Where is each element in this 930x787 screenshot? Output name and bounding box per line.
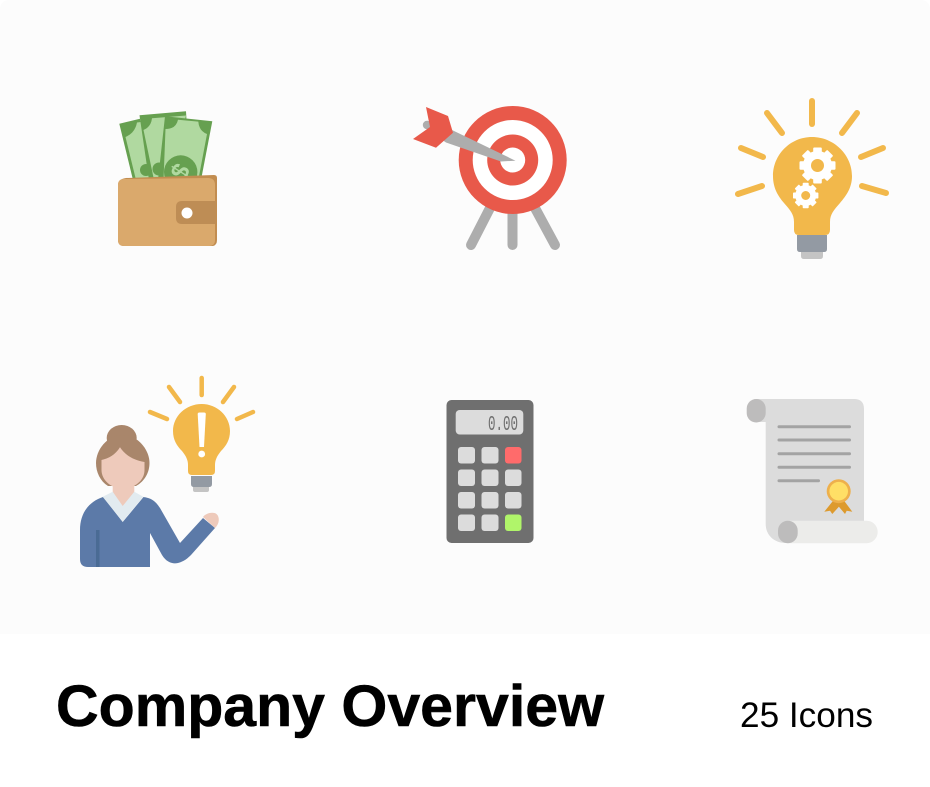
top roll end xyxy=(747,399,766,422)
large gear xyxy=(800,148,836,184)
icon: calculator xyxy=(446,400,534,543)
display xyxy=(456,410,523,434)
rays xyxy=(738,101,886,194)
bulb base xyxy=(797,235,827,259)
wallet clasp xyxy=(176,201,216,224)
text lines xyxy=(779,427,850,481)
icon: target with arrow xyxy=(413,106,567,245)
target stand xyxy=(471,208,555,245)
paper sheet xyxy=(756,399,864,543)
idea bulb base xyxy=(191,476,212,492)
hand xyxy=(203,513,219,528)
icon: wallet with money xyxy=(118,111,217,246)
collar xyxy=(103,492,143,522)
seal ribbon xyxy=(824,500,852,514)
middle banknote xyxy=(140,111,190,180)
icon count: 25 Icons xyxy=(740,696,873,735)
sleeve seam xyxy=(96,530,100,567)
arrow xyxy=(413,107,516,162)
seal medal xyxy=(827,479,851,503)
calculator body xyxy=(446,400,534,543)
title: Company Overview xyxy=(56,674,605,739)
target rings xyxy=(459,106,567,214)
small gear xyxy=(793,183,818,208)
sweater xyxy=(80,497,215,567)
display reading: 0.00 xyxy=(488,414,518,437)
wallet body xyxy=(118,175,217,246)
bulb glass xyxy=(773,137,852,235)
icon: person with idea bulb xyxy=(80,378,253,567)
back banknote xyxy=(119,119,152,180)
front banknote: $ xyxy=(165,159,196,185)
hair xyxy=(96,425,150,486)
icon: light bulb with gears xyxy=(738,101,886,259)
idea rays xyxy=(150,378,253,419)
neck and face xyxy=(102,447,144,507)
exclamation mark xyxy=(198,412,206,457)
idea bulb xyxy=(173,404,230,475)
keypad xyxy=(458,447,522,531)
icon: certificate scroll xyxy=(747,399,878,543)
bottom roll xyxy=(778,521,878,543)
